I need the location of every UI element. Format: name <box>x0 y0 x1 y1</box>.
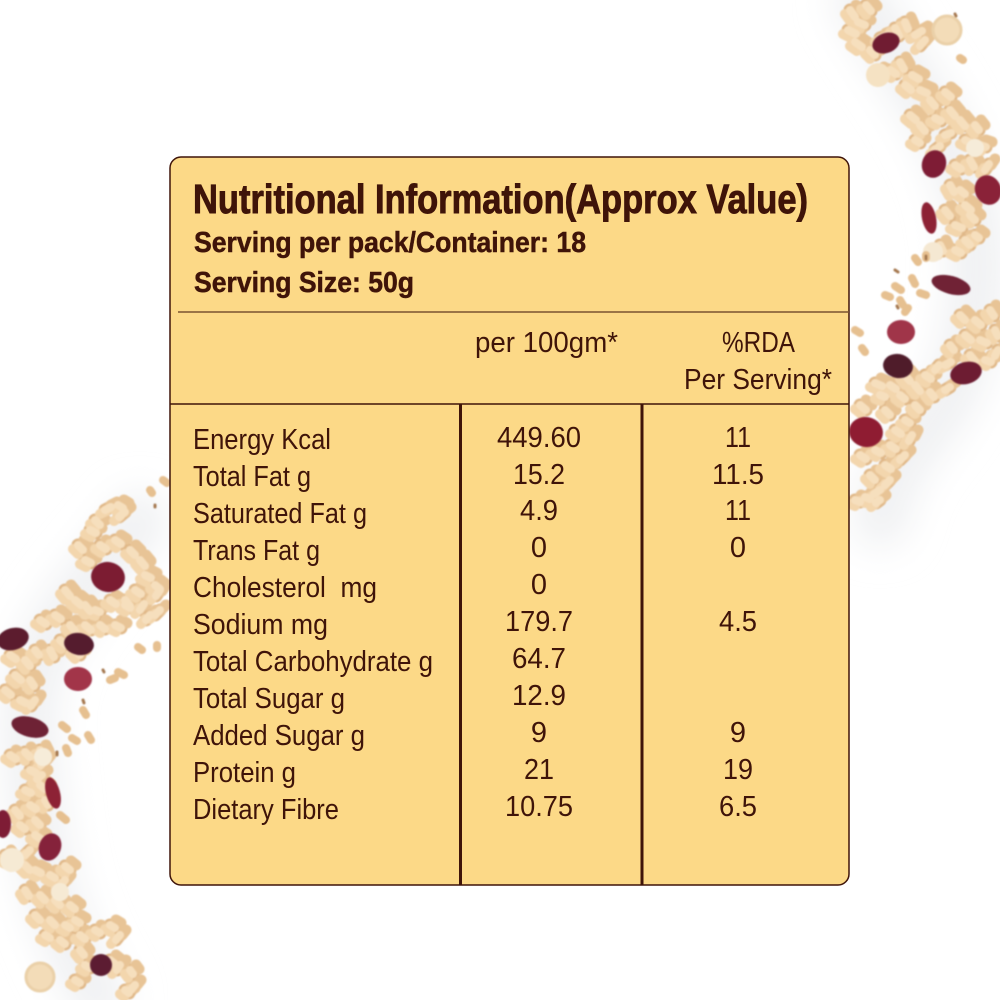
cranberries: bottom left <box>0 559 127 976</box>
per 100gm values: 15.2 <box>513 459 565 491</box>
nutrient labels: Trans Fat g <box>193 535 320 567</box>
per 100gm values: 12.9 <box>512 680 566 712</box>
column header: RDA per serving: Per Serving* <box>684 364 832 396</box>
title: Nutritional Information(Approx Value) <box>193 176 808 222</box>
per 100gm values: 0 <box>531 532 547 564</box>
per 100gm values: 64.7 <box>512 643 566 675</box>
RDA values: 19 <box>723 754 753 786</box>
nutrient labels: Sodium mg <box>193 609 328 641</box>
column header: RDA per serving <box>684 327 832 396</box>
column header: per 100gm: per 100gm* <box>475 327 618 359</box>
RDA values: 11.5 <box>712 459 764 491</box>
nutrient labels: Cholesterol mg <box>193 572 377 604</box>
nutrient labels: Protein g <box>193 757 296 789</box>
RDA values: 4.5 <box>719 606 757 638</box>
per 100gm values: 21 <box>524 754 554 786</box>
RDA values: 11 <box>725 422 751 454</box>
nutrient labels: Added Sugar g <box>193 720 365 752</box>
RDA values: 11 <box>725 495 751 527</box>
per 100gm values: 9 <box>531 717 547 749</box>
per 100gm values: 10.75 <box>505 791 573 823</box>
RDA values: 6.5 <box>719 791 757 823</box>
RDA values: 0 <box>730 532 746 564</box>
per 100gm values: 0 <box>531 569 547 601</box>
nutrient labels: Total Fat g <box>193 461 311 493</box>
nutrient labels: Saturated Fat g <box>193 498 367 530</box>
per 100gm values: 449.60 <box>497 422 581 454</box>
panel: nutrition table <box>170 157 849 885</box>
nutrient labels: Total Sugar g <box>193 683 345 715</box>
per 100gm values <box>497 422 581 823</box>
panel background <box>170 157 849 885</box>
nutrient labels <box>193 424 433 826</box>
per 100gm values: 4.9 <box>520 495 558 527</box>
nutrient labels: Energy Kcal <box>193 424 331 456</box>
RDA values <box>712 422 764 823</box>
serving size: Serving Size: 50g <box>194 267 414 299</box>
serving per pack: Serving per pack/Container: 18 <box>194 227 586 259</box>
granola strand: bottom left <box>0 480 167 997</box>
nutrient labels: Total Carbohydrate g <box>193 646 433 678</box>
column header: RDA per serving: %RDA <box>722 327 796 359</box>
per 100gm values: 179.7 <box>505 606 573 638</box>
cranberries: top right <box>847 29 1000 450</box>
RDA values: 9 <box>730 717 746 749</box>
nutrient labels: Dietary Fibre <box>193 794 339 826</box>
granola strand: top right <box>843 0 1000 507</box>
